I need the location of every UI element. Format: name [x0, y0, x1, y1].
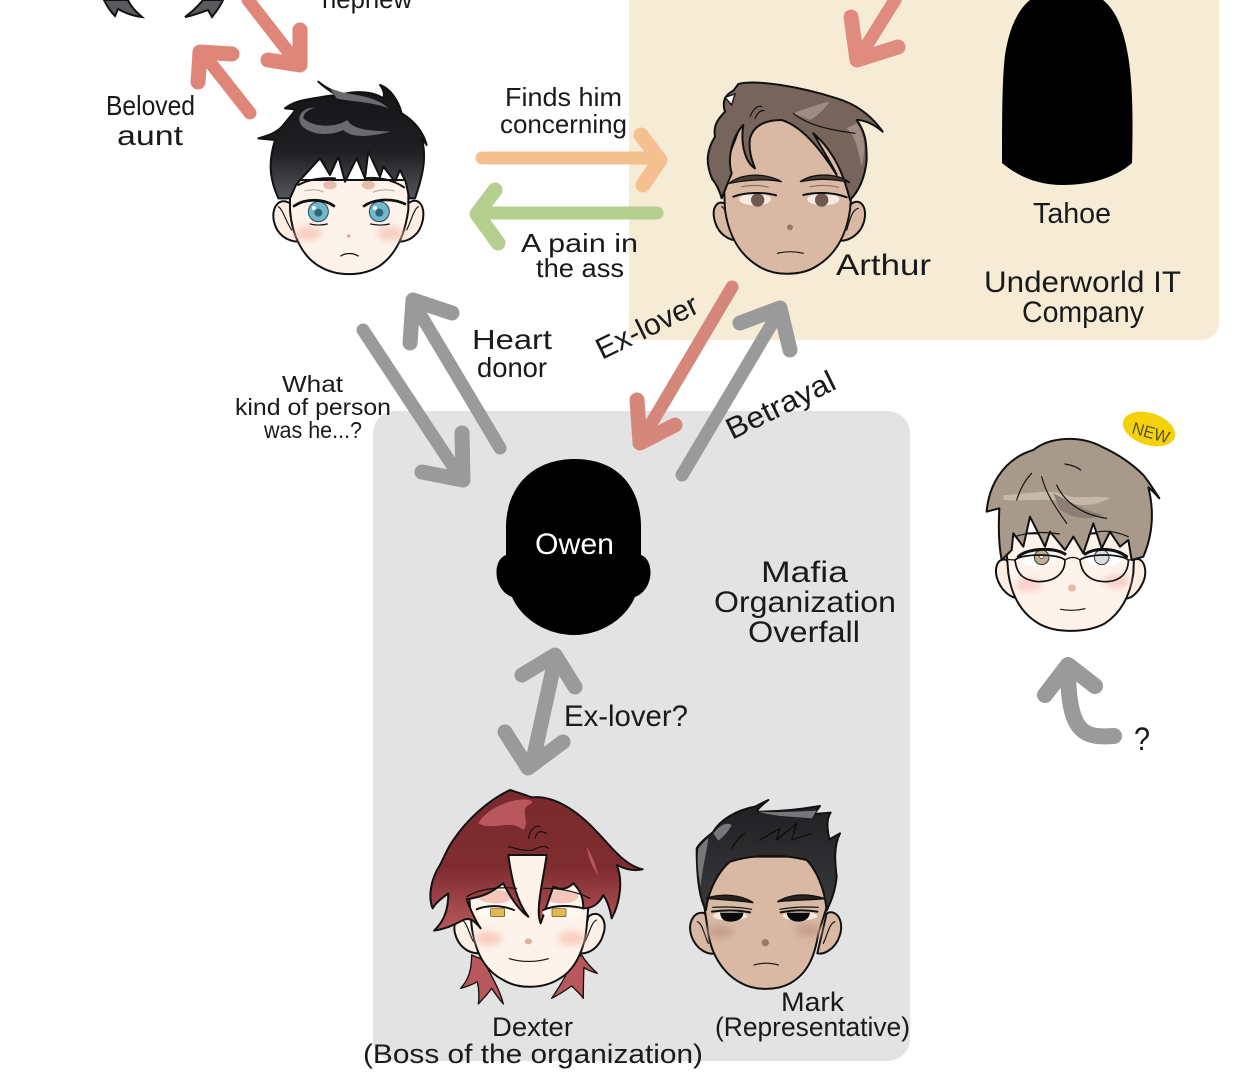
arrow: beloved aunt: [198, 52, 250, 113]
label: Mafia Organization Overfall: [714, 556, 896, 649]
label: heart donor: Heart: [472, 324, 552, 355]
character: new glasses character: [987, 439, 1159, 631]
label: a pain in the ass: A pain in: [521, 228, 638, 258]
character silhouette: Owen: Owen: [535, 528, 614, 561]
label: heart donor: [472, 324, 552, 383]
arrow: finds him concerning: [482, 135, 660, 185]
label: finds him concerning: concerning: [500, 109, 627, 139]
arrow: what kind of person: [363, 330, 463, 480]
label: Mafia Organization Overfall: Organization: [714, 586, 896, 619]
panel: mafia organization background: [373, 411, 910, 1061]
label: Mafia Organization Overfall: Mafia: [761, 556, 848, 589]
arrow: into company panel: [851, 0, 898, 60]
character: Dexter: [430, 790, 643, 1004]
arrow: heart donor: [410, 300, 500, 448]
label: what kind of person was he: kind of person: [235, 394, 391, 420]
label: a pain in the ass: the ass: [536, 253, 624, 283]
label: Underworld IT Company: [984, 266, 1181, 329]
character silhouette: Owen: [496, 459, 651, 635]
label: a pain in the ass: [521, 228, 638, 283]
label: beloved aunt: Beloved: [106, 90, 195, 121]
character: Arthur: [708, 83, 883, 274]
label: Mafia Organization Overfall: Overfall: [748, 616, 860, 649]
label: finds him concerning: [500, 82, 627, 139]
label: heart donor: donor: [477, 352, 547, 383]
arrow: curved question arrow: [1045, 665, 1114, 736]
label: Underworld IT Company: Company: [1022, 296, 1144, 329]
arrow: ex-lover question: [505, 655, 575, 768]
character: Mark: [690, 800, 841, 989]
label: ex-lover?: Ex-lover?: [564, 700, 688, 733]
arrow: a pain in the ass: [477, 190, 657, 243]
label: what kind of person was he: was he...?: [263, 417, 362, 443]
label: beloved aunt: aunt: [117, 120, 183, 151]
label: ex-lover: Ex-lover: [591, 288, 704, 366]
label: question mark: ?: [1134, 721, 1150, 757]
partial character hair at top edge: [104, 0, 223, 17]
label: Underworld IT Company: Underworld IT: [984, 266, 1181, 299]
label: Dexter and role: Dexter: [492, 1012, 573, 1042]
label: what kind of person was he: [235, 371, 391, 443]
label: Mark and role: [715, 987, 910, 1042]
character: black-haired boy: [258, 82, 427, 274]
label: Arthur: Arthur: [836, 249, 931, 282]
panel: underworld IT company background: [629, 0, 1219, 340]
label: Mark and role: (Representative): [715, 1012, 910, 1042]
label: beloved aunt: [106, 90, 195, 151]
label: what kind of person was he: What: [282, 371, 344, 397]
label: Tahoe: Tahoe: [1033, 198, 1111, 230]
badge: NEW: [1118, 405, 1180, 453]
label: finds him concerning: Finds him: [505, 82, 622, 112]
label: Dexter and role: (Boss of the organization): [363, 1039, 703, 1069]
badge: NEW: NEW: [1130, 419, 1172, 447]
label: Mark and role: Mark: [781, 987, 845, 1017]
arrow: nephew: [248, 0, 300, 65]
icon: Tahoe silhouette: [1002, 0, 1132, 185]
arrow: ex-lover: [637, 287, 732, 443]
label: Dexter and role: [363, 1012, 703, 1069]
arrow: betrayal: [682, 308, 790, 475]
label: betrayal: Betrayal: [721, 365, 841, 446]
